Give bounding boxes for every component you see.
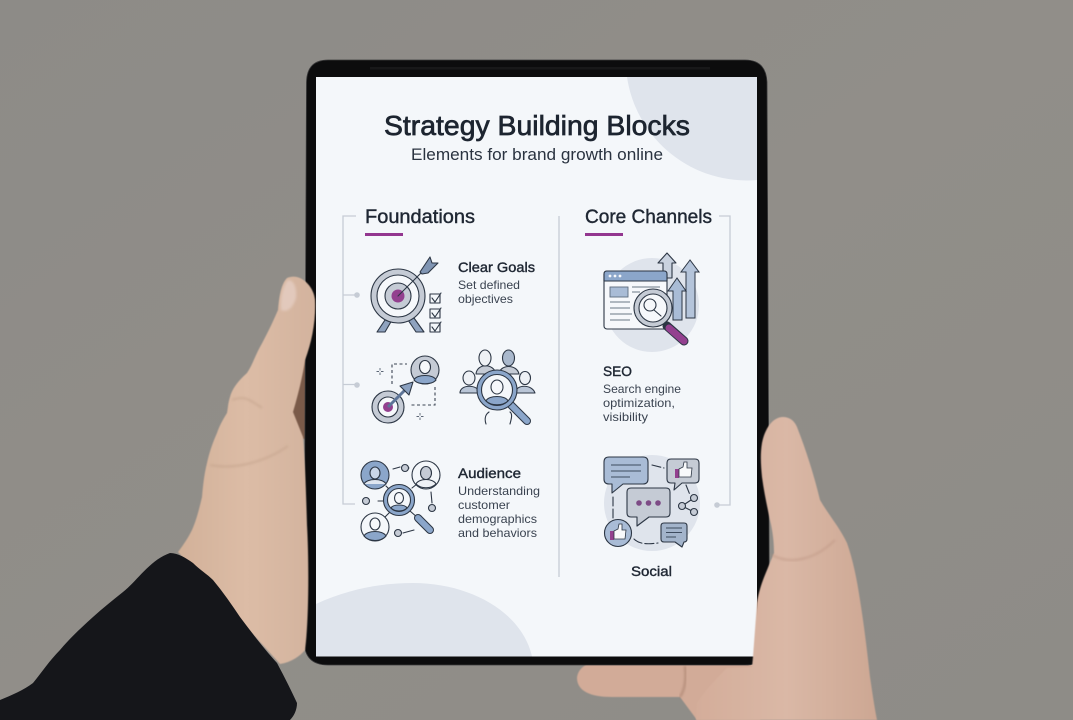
text: Clear Goals: objectives: [458, 292, 513, 306]
right hand: [696, 417, 877, 720]
heading: Core Channels: Core Channels: [585, 207, 712, 228]
heading: Foundations: Foundations: [365, 207, 475, 228]
decorative blob bottom left: [316, 583, 532, 656]
blue chat bubble: [604, 457, 648, 493]
heading: Foundations: [365, 207, 475, 236]
text: Audience: customer: [458, 498, 510, 512]
left sleeve: [0, 553, 297, 720]
fingers behind the tablet, left: [290, 345, 310, 442]
left bracket connector: [343, 216, 360, 504]
center divider: [558, 216, 560, 577]
title: Strategy Building Blocks: [384, 110, 690, 141]
tablet top camera strip: [370, 67, 710, 70]
dots bubble: [627, 488, 670, 526]
right bracket connector: [714, 216, 730, 508]
icon: target with arrow and checklist: [371, 257, 441, 332]
share nodes: [682, 498, 694, 512]
text: Audience: Audience: [458, 465, 521, 481]
icon: social media bubbles and likes: [604, 455, 700, 551]
icon: audience group with magnifier: [460, 350, 535, 424]
text: SEO: SEO: [603, 363, 632, 379]
text: SEO: optimization,: [603, 396, 675, 410]
text: SEO: [603, 363, 681, 424]
left thumb nail: [281, 280, 296, 311]
icon: audience network with magnifier: [361, 461, 440, 541]
subtitle: Elements for brand growth online: [411, 146, 663, 164]
finger crease: [680, 666, 685, 697]
left palm creases: [210, 398, 288, 466]
icon: SEO browser with magnifier and arrows: [604, 253, 699, 352]
tablet body: [304, 60, 770, 665]
like bubble: [667, 459, 699, 490]
right hand lower finger: [577, 650, 760, 720]
text: Audience: and behaviors: [458, 526, 537, 540]
decorative blob top right: [627, 77, 757, 180]
text: SEO: Search engine: [603, 382, 681, 396]
small chat bubble: [661, 523, 687, 547]
right thumb crease: [772, 540, 835, 560]
text: SEO: visibility: [603, 410, 648, 424]
text: Social: Social: [631, 563, 672, 579]
left hand: [178, 277, 315, 664]
text: Audience: [458, 465, 540, 540]
tablet screen: [316, 77, 757, 656]
text: Audience: Understanding: [458, 484, 540, 498]
text: Audience: demographics: [458, 512, 537, 526]
text: Clear Goals: Set defined: [458, 278, 520, 292]
text: Clear Goals: [458, 259, 535, 306]
icon: target path to customer: [372, 356, 439, 423]
text: Clear Goals: Clear Goals: [458, 259, 535, 275]
like circle: [604, 520, 632, 546]
